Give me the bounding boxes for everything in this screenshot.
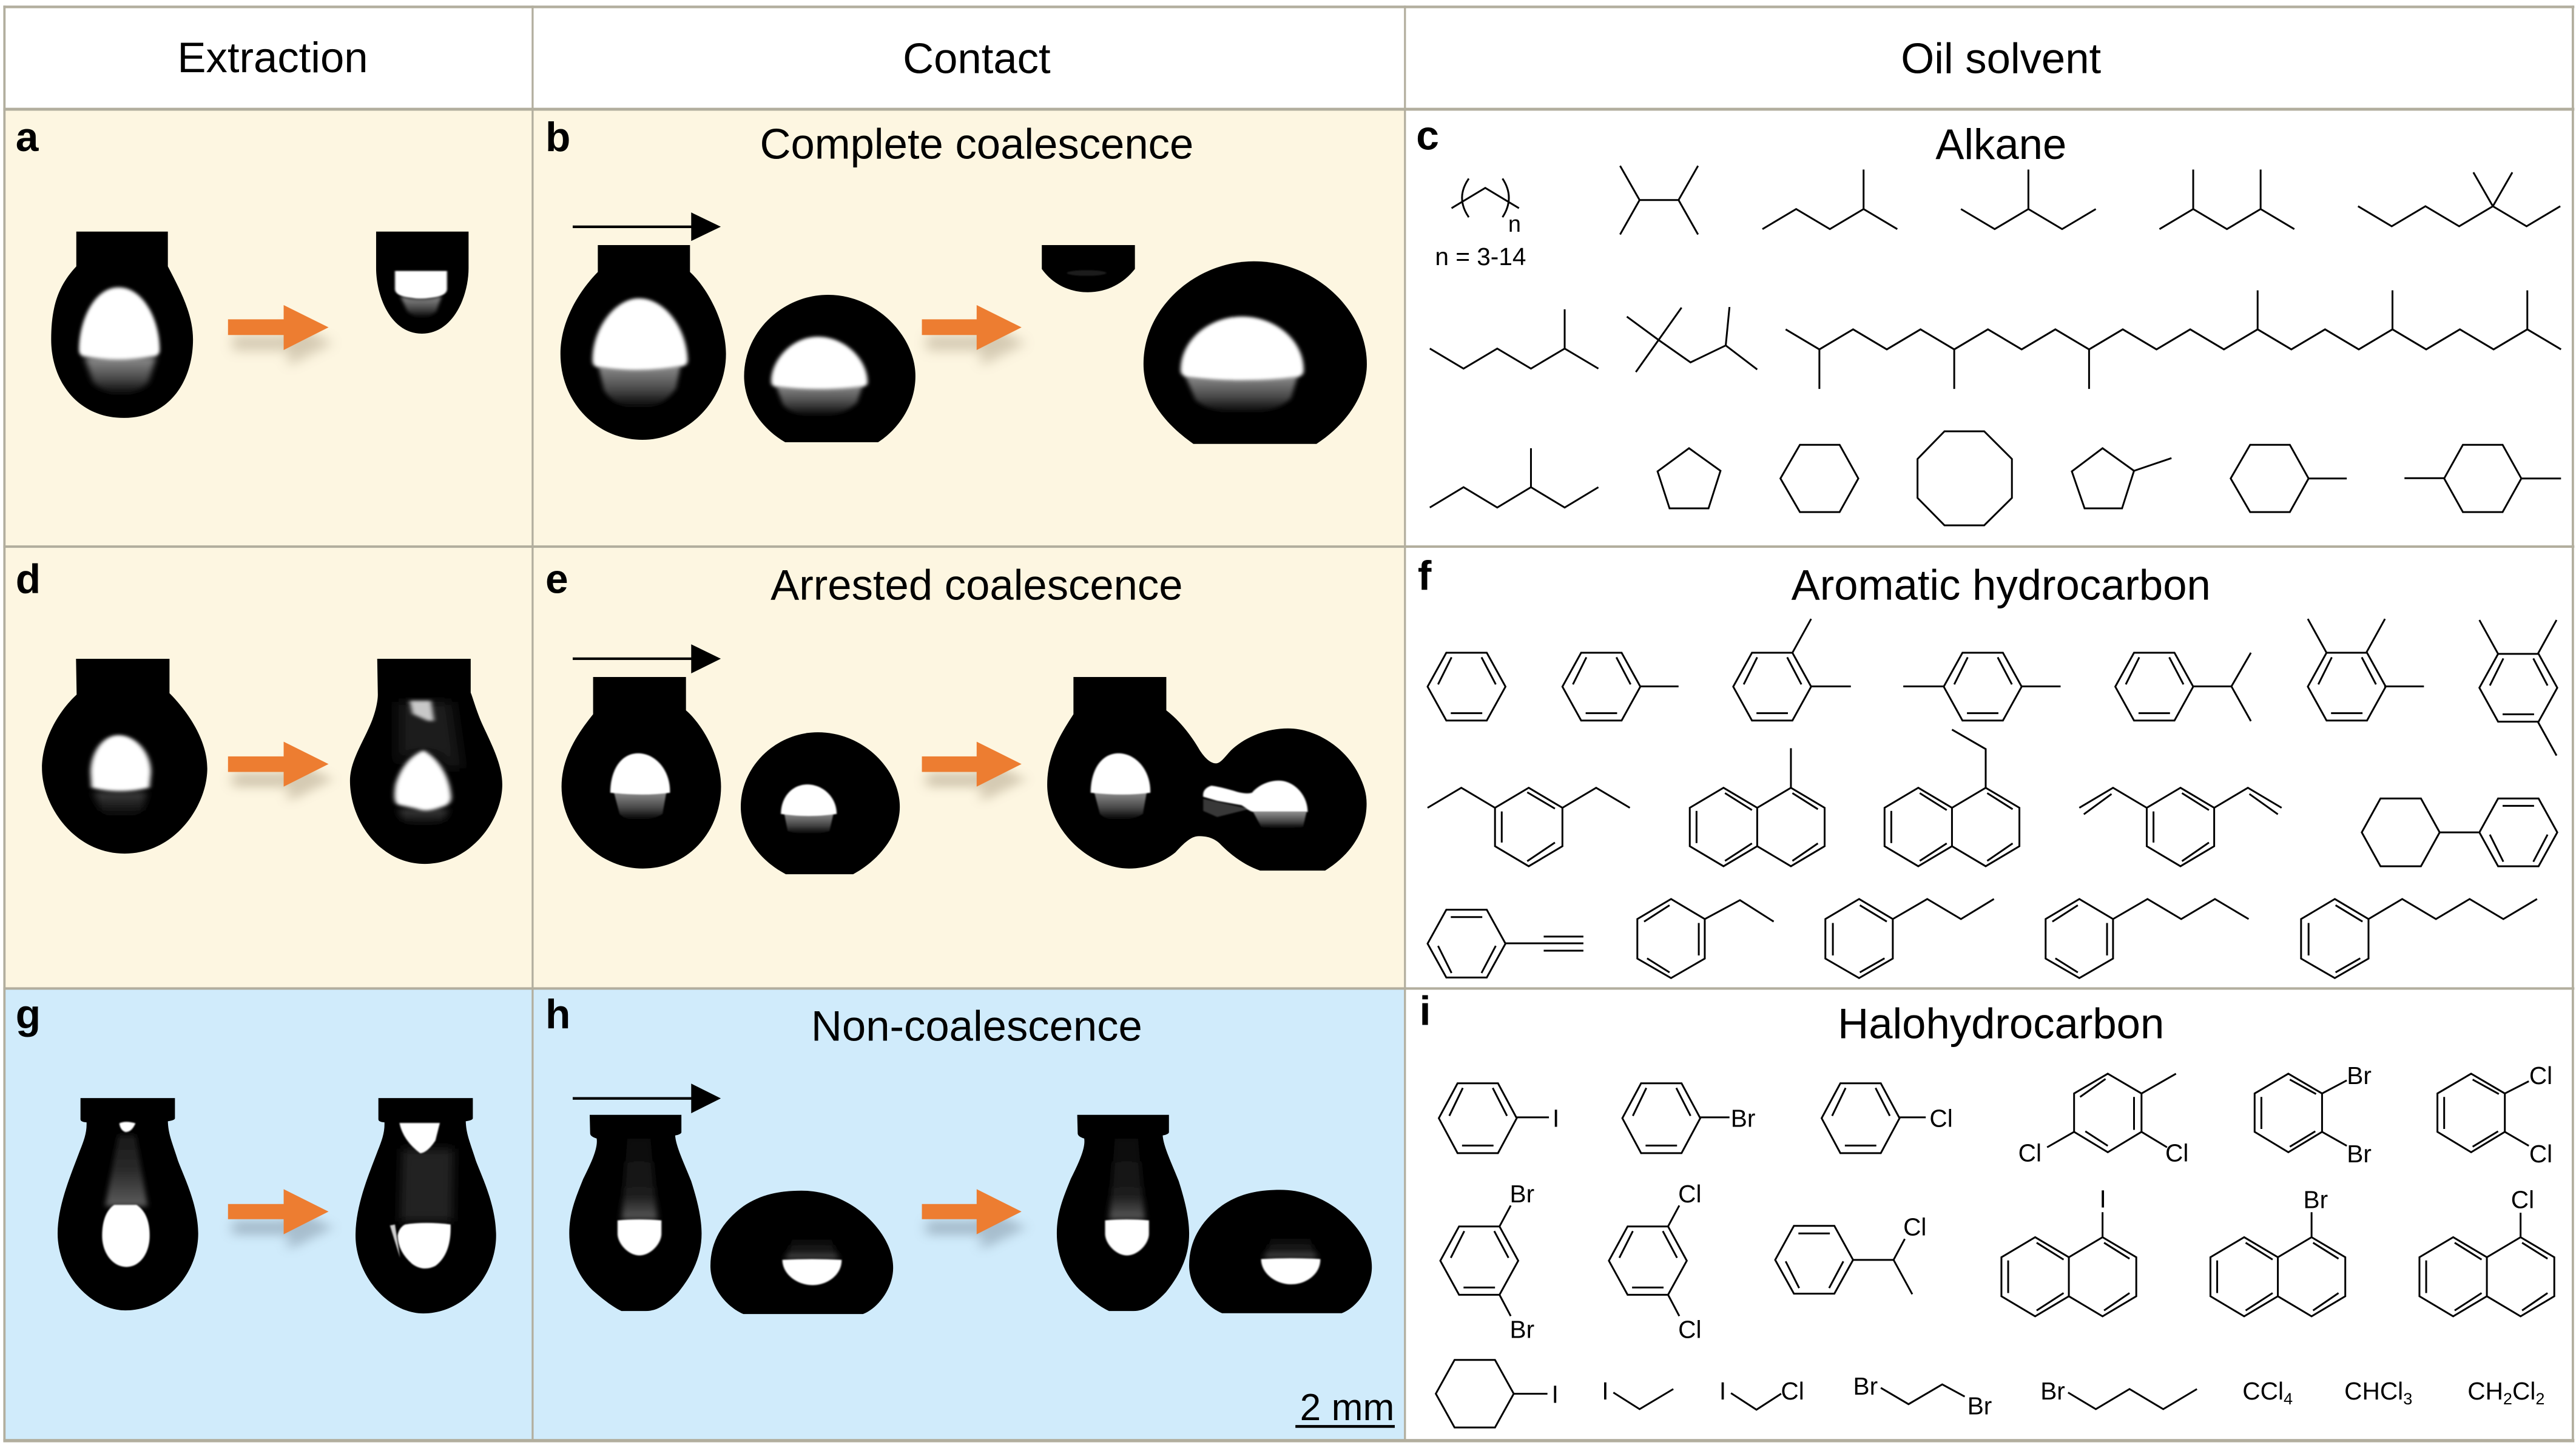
molecule: chloroiodomethane chain	[1719, 1377, 1804, 1410]
panel label d: d	[16, 557, 41, 602]
droplet h pendant after contact	[1057, 1115, 1189, 1311]
molecule: n-alkane repeat unit: n = 3-14	[1435, 243, 1526, 271]
arrow: contact e	[922, 742, 1026, 802]
molecule: 1-iodonaphthalene: I	[2099, 1185, 2106, 1213]
molecule: 1,2,4-trimethylbenzene	[2480, 620, 2557, 755]
molecule: phenylacetylene	[1428, 910, 1583, 977]
molecule: 1,4-dimethylcyclohexane	[2404, 445, 2561, 512]
panel label c: c	[1416, 113, 1439, 158]
molecule: methylcyclopentane	[2072, 448, 2171, 508]
molecule: 2-methylpentane	[1762, 169, 1897, 229]
molecule: 1,2-dibromobenzene: Br	[2347, 1140, 2372, 1168]
molecule: cyclopentane	[1657, 448, 1721, 508]
molecule: 1-bromonaphthalene	[2210, 1186, 2345, 1316]
arrow: extraction g	[228, 1189, 333, 1250]
droplet b residual on nozzle	[1042, 245, 1135, 292]
droplet g after extraction	[356, 1098, 496, 1313]
motion arrow b	[573, 212, 721, 241]
molecule: 1-chloronaphthalene: Cl	[2511, 1186, 2534, 1214]
molecule: carbon tetrachloride: CCl	[2242, 1377, 2284, 1405]
molecule: chloroiodomethane chain: Cl	[1781, 1377, 1804, 1405]
molecule: n-alkane repeat unit	[1435, 178, 1526, 271]
molecule: dichloromethane: 2	[2503, 1389, 2512, 1408]
molecule: 1-methylnaphthalene	[1690, 748, 1825, 866]
molecule: 2,2-dimethylhexane	[2358, 172, 2560, 226]
molecule: 1-bromobutane: Br	[2040, 1377, 2065, 1405]
molecule: iodoethane: I	[1602, 1377, 1609, 1405]
header: Contact: Contact	[903, 35, 1051, 83]
molecule: 2,4-dichlorotoluene: Cl	[2018, 1139, 2042, 1167]
heading: Arrested coalescence: Arrested coalescence	[770, 561, 1183, 608]
molecule: ethylbenzene	[1637, 899, 1774, 978]
droplet b coalesced	[1144, 261, 1367, 444]
droplet e sessile	[741, 732, 900, 874]
molecule: cumene	[2116, 653, 2251, 721]
molecule: 1-bromonaphthalene: Br	[2303, 1186, 2328, 1214]
droplet d after extraction	[350, 659, 502, 864]
arrow: contact b	[922, 305, 1026, 366]
droplet b sessile	[744, 295, 915, 442]
droplet g before extraction	[58, 1098, 198, 1310]
heading: Alkane: Alkane	[1935, 120, 2066, 168]
molecule: 1,3-divinylbenzene	[2079, 788, 2282, 866]
droplet h sessile after contact	[1189, 1190, 1372, 1313]
heading: Aromatic hydrocarbon: Aromatic hydrocarbon	[1792, 561, 2211, 608]
molecule: 1-chloroethylbenzene: Cl	[1903, 1213, 1926, 1241]
arrow: contact h	[922, 1189, 1026, 1250]
molecule: 1,2-dibromobenzene	[2254, 1062, 2372, 1168]
molecule: 2,3-dimethylbutane	[1620, 166, 1698, 235]
molecule: 1,2-dibromoethane: Br	[1967, 1392, 1992, 1420]
molecule: n-alkane repeat unit: n	[1508, 212, 1521, 237]
molecule: 1-chloroethylbenzene	[1775, 1213, 1926, 1294]
molecule: benzene	[1428, 653, 1505, 721]
panel label a: a	[16, 115, 39, 160]
droplet h pendant	[569, 1115, 701, 1311]
molecule: cyclooctane	[1918, 431, 2012, 525]
molecule: 1,4-dichlorobenzene	[1609, 1180, 1701, 1344]
droplet b pendant	[561, 245, 726, 440]
header: Extraction: Extraction	[177, 33, 368, 81]
molecule: 2,4-dichlorotoluene	[2018, 1074, 2188, 1167]
molecule: p-xylene	[1903, 653, 2060, 721]
molecule: chlorobenzene: Cl	[1929, 1105, 1953, 1133]
header: Oil solvent: Oil solvent	[1901, 35, 2102, 83]
molecule: 2,2,4-trimethylpentane	[1627, 307, 1757, 372]
molecule: o-xylene	[1733, 619, 1851, 721]
molecule: cyclohexane	[1781, 445, 1858, 512]
droplet e pendant	[562, 677, 721, 869]
droplet h sessile	[710, 1191, 893, 1314]
panel i: halohydrocarbon structures	[1436, 1062, 2554, 1427]
molecule: bromobenzene	[1622, 1083, 1755, 1153]
molecule: dichloromethane: 2	[2535, 1389, 2544, 1408]
droplet d before extraction	[42, 659, 207, 854]
molecule: squalane	[1785, 291, 2561, 389]
molecule: iodoethane	[1602, 1377, 1673, 1409]
molecule: 1,3-diethylbenzene	[1428, 788, 1630, 866]
molecule: 3-methylhexane	[1430, 448, 1599, 508]
molecule: methylcyclohexane	[2231, 445, 2347, 512]
molecule: 1,2,3-trimethylbenzene	[2308, 619, 2424, 721]
panel label i: i	[1420, 989, 1431, 1034]
molecule: 1,4-dichlorobenzene: Cl	[1678, 1180, 1701, 1208]
droplet e arrested bridge	[1047, 677, 1367, 871]
panel label f: f	[1418, 553, 1432, 599]
molecule: 1,2-dibromobenzene: Br	[2347, 1062, 2372, 1090]
molecule: 1-chloronaphthalene	[2419, 1186, 2554, 1316]
molecule: 1,2-dibromoethane: Br	[1853, 1372, 1878, 1400]
molecule: pentylbenzene	[2301, 899, 2537, 978]
molecule: dichloromethane: CH	[2467, 1377, 2503, 1405]
heading: Non-coalescence: Non-coalescence	[811, 1002, 1142, 1049]
molecule: 1-ethylnaphthalene	[1884, 730, 2020, 866]
molecule: 2,4-dichlorotoluene: Cl	[2165, 1139, 2188, 1167]
molecule: carbon tetrachloride: 4	[2284, 1389, 2293, 1408]
molecule: 3-methylpentane	[1961, 169, 2096, 229]
molecule: 1,2-dichlorobenzene	[2438, 1062, 2552, 1168]
molecule: dichloromethane: Cl	[2512, 1377, 2535, 1405]
panel label h: h	[545, 992, 570, 1037]
molecule: phenylcyclohexane	[2362, 798, 2557, 866]
molecule: 1,2-dichlorobenzene: Cl	[2529, 1140, 2552, 1168]
molecule: butylbenzene	[2046, 899, 2248, 978]
molecule: chloroform: CHCl	[2344, 1377, 2403, 1405]
arrow: extraction d	[228, 742, 333, 802]
molecule: iodocyclohexane	[1436, 1360, 1559, 1427]
molecule: 1,4-dibromobenzene	[1440, 1180, 1534, 1344]
droplet a before extraction	[51, 232, 193, 418]
motion arrow h	[573, 1083, 721, 1113]
molecule: 1,4-dichlorobenzene: Cl	[1678, 1316, 1701, 1344]
molecule: 1,2-dichlorobenzene: Cl	[2529, 1062, 2552, 1090]
molecule: 1,4-dibromobenzene: Br	[1510, 1180, 1534, 1208]
molecule: bromobenzene: Br	[1731, 1105, 1755, 1133]
arrow: extraction a	[228, 305, 333, 366]
molecule: iodobenzene	[1439, 1083, 1559, 1153]
panel label b: b	[545, 115, 570, 160]
molecule: chloroiodomethane chain: I	[1719, 1377, 1726, 1405]
molecule: chlorobenzene	[1822, 1083, 1953, 1153]
molecule: 1-iodonaphthalene	[2001, 1185, 2136, 1316]
molecule: 1,4-dibromobenzene: Br	[1510, 1316, 1534, 1344]
scale bar: 2 mm	[1300, 1387, 1394, 1429]
heading: Complete coalescence: Complete coalescence	[760, 120, 1193, 167]
molecule: 2,4-dimethylpentane	[2159, 169, 2294, 229]
molecule: toluene	[1562, 653, 1679, 721]
molecule: 1,2-dibromoethane	[1853, 1372, 1992, 1420]
molecule: propylbenzene	[1826, 899, 1994, 978]
molecule: chloroform: 3	[2403, 1389, 2412, 1408]
molecule: 1-bromobutane	[2040, 1377, 2197, 1409]
panel c: alkane structures	[1430, 166, 2561, 525]
panel label e: e	[545, 557, 568, 602]
panel label g: g	[16, 992, 41, 1037]
molecule: 2-methylhexane	[1430, 309, 1599, 369]
heading: Halohydrocarbon: Halohydrocarbon	[1838, 999, 2164, 1047]
motion arrow e	[573, 644, 721, 673]
panel f: aromatic hydrocarbon structures	[1428, 619, 2557, 978]
molecule: iodobenzene: I	[1553, 1105, 1559, 1133]
molecule: iodocyclohexane: I	[1552, 1381, 1559, 1409]
droplet a after extraction	[376, 232, 468, 334]
